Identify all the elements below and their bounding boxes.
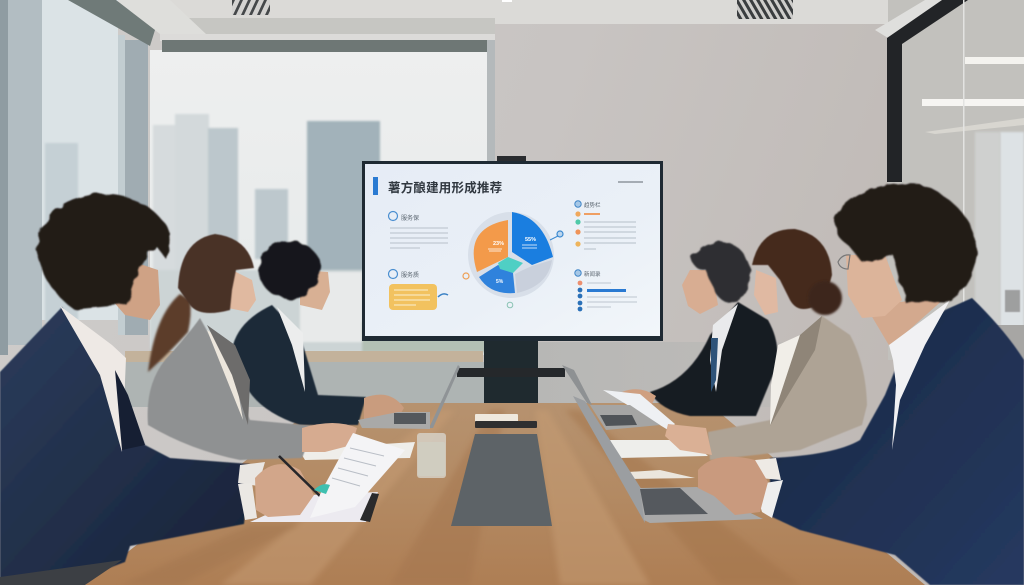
cuff <box>754 480 783 518</box>
monitor stand <box>457 156 565 406</box>
pie chart: 23% <box>493 241 504 247</box>
right block: legend top <box>575 201 636 249</box>
slide title <box>373 177 643 195</box>
lapel <box>770 316 822 426</box>
person: front right, navy suit <box>698 184 1024 585</box>
hands <box>698 457 768 515</box>
hair <box>36 194 171 310</box>
hair <box>692 243 750 303</box>
slide background <box>365 164 660 336</box>
left block: text: 服务保 <box>401 214 419 222</box>
left block: callout: 服务质 <box>401 271 419 279</box>
hand <box>302 423 357 452</box>
jacket <box>708 316 867 460</box>
table runner <box>451 434 552 526</box>
glass door: right <box>875 0 1024 365</box>
face <box>300 270 330 310</box>
laptop: far left <box>358 365 460 429</box>
face <box>754 270 778 315</box>
glass of water <box>417 433 446 478</box>
face <box>846 255 902 318</box>
hands <box>255 464 314 517</box>
clipboard <box>250 492 378 522</box>
pen <box>279 456 322 498</box>
jacket <box>148 318 315 460</box>
slide title: 薯方酿建用形成推荐 <box>388 180 502 195</box>
shirt <box>277 307 305 392</box>
pie chart <box>463 212 563 308</box>
right block: legend bottom: 新闻录 <box>584 270 601 278</box>
paper <box>310 433 405 518</box>
hand <box>622 389 656 408</box>
left block: text <box>388 212 448 248</box>
window sill <box>125 342 868 407</box>
person: woman in gray suit <box>148 234 415 460</box>
lapel <box>207 325 250 425</box>
jacket <box>233 305 366 425</box>
hand <box>665 424 712 455</box>
right block: legend bottom <box>575 270 637 311</box>
white slip of paper <box>625 470 695 479</box>
shirt and tie <box>710 304 738 392</box>
window: city view <box>150 40 495 355</box>
display screen <box>362 161 663 341</box>
hair <box>835 184 977 303</box>
face <box>228 270 256 312</box>
notebook <box>610 440 708 458</box>
conference table <box>85 403 925 585</box>
left block: callout <box>388 270 448 310</box>
shirt <box>889 300 950 450</box>
hair and bun <box>752 229 832 309</box>
cuffs <box>238 462 265 520</box>
glasses <box>838 255 850 269</box>
neck <box>865 298 945 347</box>
paper held by man <box>603 390 675 430</box>
window: left panels <box>0 0 155 355</box>
jacket <box>650 302 777 416</box>
chair edge <box>0 560 122 585</box>
ceiling <box>116 0 920 41</box>
laptop: far right <box>562 365 660 430</box>
person: far left, dark suit with glasses <box>233 241 404 425</box>
hair <box>178 234 254 313</box>
shirt <box>60 306 126 452</box>
person: front left, navy suit <box>0 194 405 585</box>
ponytail <box>148 294 191 372</box>
small items centre: pad and phone <box>475 414 537 428</box>
blouse <box>207 330 243 420</box>
person: woman in beige suit <box>610 229 867 460</box>
screen frame <box>362 161 663 341</box>
hand <box>364 395 404 420</box>
blouse <box>770 335 800 425</box>
lapel shadow <box>115 370 145 450</box>
jacket <box>770 298 1024 585</box>
right block: legend top: 趋势栏 <box>584 201 601 209</box>
face <box>682 270 718 314</box>
hair <box>259 241 321 299</box>
pie chart: 5% <box>496 279 504 285</box>
jacket <box>0 307 250 578</box>
pie chart: 55% <box>525 237 536 243</box>
face <box>112 260 160 320</box>
notebook <box>300 442 415 460</box>
laptop: front right <box>573 396 763 523</box>
person: far right, older man <box>622 243 777 416</box>
